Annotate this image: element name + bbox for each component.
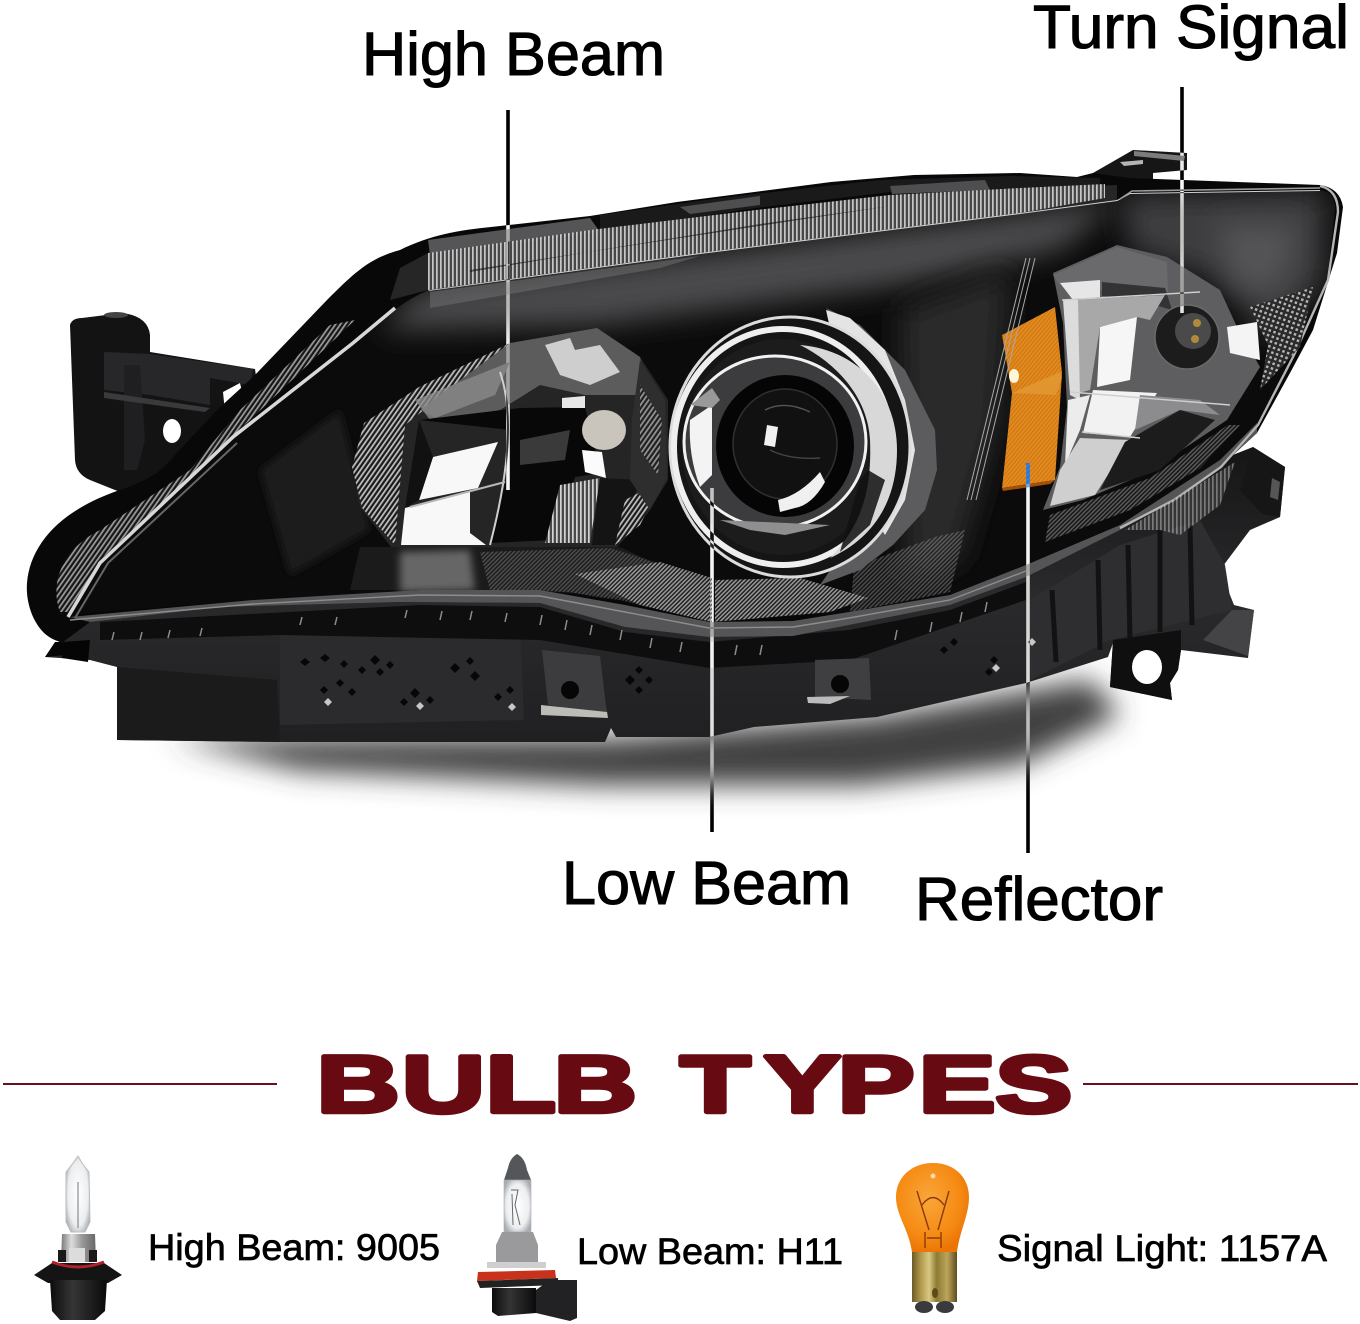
brass base xyxy=(912,1252,957,1302)
rear mounting bracket xyxy=(70,312,262,492)
darker left shape xyxy=(260,410,370,575)
bulb: 9005 high beam xyxy=(34,1156,122,1320)
chrome top xyxy=(1053,247,1168,292)
red seal xyxy=(52,1262,104,1267)
facet lines xyxy=(1062,292,1230,438)
flange xyxy=(34,1263,122,1283)
grey cap xyxy=(504,1154,531,1180)
bright left reflection xyxy=(690,405,712,487)
chrome triple lines xyxy=(967,258,1035,500)
divider left xyxy=(3,1083,277,1085)
connector xyxy=(536,1280,577,1321)
divider right xyxy=(1083,1083,1358,1085)
fluted strip lower line xyxy=(428,213,1020,290)
lower hatched reflections xyxy=(350,547,710,622)
label: low beam H11: Low Beam: H11 xyxy=(577,1231,843,1272)
leader: high beam xyxy=(506,110,510,490)
lower white patch xyxy=(401,492,486,545)
label: reflector: Reflector xyxy=(915,865,1163,933)
chrome upper xyxy=(420,328,650,420)
chrome lens edge xyxy=(68,308,395,617)
metal collar xyxy=(61,1234,96,1262)
lower housing xyxy=(45,447,1285,742)
lens highlights xyxy=(764,425,778,447)
upper clip tab xyxy=(1090,150,1187,186)
grey centre lug with hole xyxy=(541,650,608,718)
bulb socket xyxy=(1155,305,1219,369)
ribbed side panel xyxy=(1030,520,1232,680)
lower right bezel hatch xyxy=(1045,425,1240,542)
dotted panel xyxy=(1250,287,1313,390)
leader lines xyxy=(508,87,1182,853)
upper grey sheen xyxy=(380,200,1120,330)
white facet patches xyxy=(1072,295,1165,395)
label: high beam: High Beam xyxy=(362,20,665,88)
heading: bulb types: BULB TYPES xyxy=(317,1040,1072,1130)
bright blob xyxy=(582,450,606,478)
black projector lens xyxy=(716,375,854,517)
glass envelope xyxy=(504,1180,531,1232)
right upper tab xyxy=(1240,447,1285,517)
hatched rim xyxy=(352,343,515,545)
projector low beam xyxy=(670,308,937,585)
black inner cavity xyxy=(419,407,601,543)
right white patch xyxy=(1227,322,1260,360)
leader: turn signal xyxy=(1180,87,1184,313)
mounting ear with hole xyxy=(1110,630,1181,700)
top trim band xyxy=(390,185,1117,300)
ground shadow xyxy=(170,680,1120,785)
upper white patch xyxy=(419,442,498,500)
plug body xyxy=(50,1280,107,1320)
striped right panel xyxy=(545,478,600,543)
high beam reflector xyxy=(352,328,668,547)
chrome shroud xyxy=(820,308,937,585)
reflector shell xyxy=(1043,245,1260,510)
leader: reflector xyxy=(1026,463,1030,853)
flange xyxy=(477,1278,558,1288)
reflector shell xyxy=(352,328,668,547)
hatched rear corner of lens xyxy=(56,320,355,612)
amber side reflector xyxy=(1002,307,1062,491)
rear corner foot xyxy=(45,640,90,662)
contacts xyxy=(915,1301,933,1313)
chrome crescent right xyxy=(800,345,897,558)
vent diamonds xyxy=(300,638,998,706)
shaded block, lower left xyxy=(117,667,280,742)
fluted upper strip xyxy=(428,184,1105,290)
red seal xyxy=(477,1270,556,1281)
turn signal reflector xyxy=(1043,245,1313,510)
amber glass xyxy=(896,1163,969,1252)
glass envelope xyxy=(66,1156,90,1232)
lens outer shell xyxy=(27,173,1343,642)
dark recess under lens xyxy=(100,582,1026,668)
leader: low beam xyxy=(710,488,714,832)
bulb: 1157A signal xyxy=(896,1163,969,1313)
collar xyxy=(496,1232,538,1262)
body xyxy=(492,1288,536,1316)
inner ring xyxy=(684,356,866,528)
lower lens band xyxy=(70,423,1257,637)
label: low beam: Low Beam xyxy=(562,849,851,917)
outer ring xyxy=(670,317,910,577)
label: signal light 1157A: Signal Light: 1157A xyxy=(997,1228,1327,1269)
headlight illustration xyxy=(27,150,1360,785)
lower rib ticks xyxy=(112,602,987,655)
label: high beam 9005: High Beam: 9005 xyxy=(148,1227,440,1268)
bulb cap xyxy=(582,410,626,450)
small right lug with hole xyxy=(807,658,871,704)
curved chrome rib xyxy=(490,372,508,545)
lens interior xyxy=(258,190,1335,622)
bulb: H11 low beam xyxy=(477,1154,577,1321)
grille panel xyxy=(280,625,524,725)
filament xyxy=(917,1191,949,1248)
